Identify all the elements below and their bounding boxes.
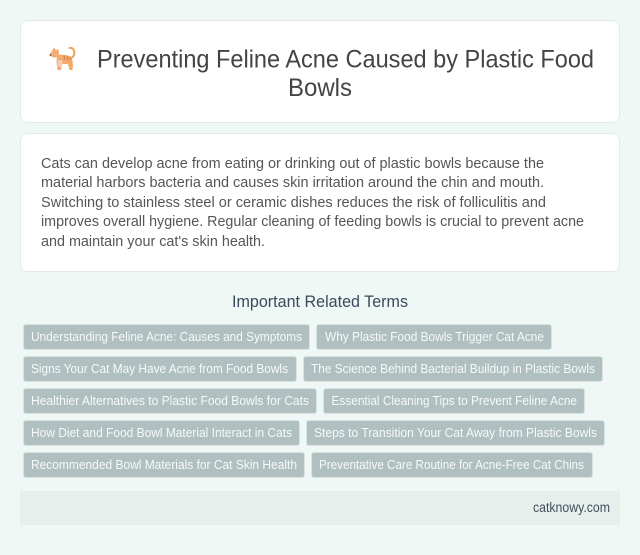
footer source text: catknowy.com [533, 500, 610, 515]
tag: understanding feline acne [24, 324, 310, 350]
tag: transition steps [306, 420, 604, 446]
footer [20, 491, 620, 525]
tag: diet and bowl material [24, 420, 300, 446]
title text [97, 46, 594, 102]
title text: Bowls [288, 74, 352, 102]
tag: preventative care routine [312, 452, 592, 478]
description text [41, 155, 584, 250]
title text: Preventing Feline Acne Caused by Plastic Food [97, 46, 594, 74]
heading: important related terms: Important Related Terms [232, 293, 408, 311]
tag: preventative care routine: Preventative Care Routine for Acne-Free Cat Chins [319, 457, 584, 472]
tag: cleaning tips: Essential Cleaning Tips to Prevent Feline Acne [332, 393, 577, 408]
description text: Switching to stainless steel or ceramic dishes reduces the risk of folliculitis and [41, 194, 546, 211]
tag: understanding feline acne: Understanding Feline Acne: Causes and Symptoms [31, 329, 302, 344]
panel: related term tags [24, 324, 604, 478]
tag: diet and bowl material: How Diet and Food Bowl Material Interact in Cats [31, 425, 292, 440]
description text: and maintain your cat's skin health. [41, 233, 265, 250]
tag: why plastic bowls trigger acne [316, 324, 552, 350]
tag: cleaning tips [324, 388, 584, 414]
panel: description card [20, 134, 620, 272]
icon: cat [50, 48, 74, 70]
tag: why plastic bowls trigger acne: Why Plastic Food Bowls Trigger Cat Acne [325, 329, 544, 344]
tag: science of bacterial buildup: The Science Behind Bacterial Buildup in Plastic Bowls [311, 361, 595, 376]
tag: transition steps: Steps to Transition Your Cat Away from Plastic Bowls [314, 425, 597, 440]
tag: signs of acne [24, 356, 296, 382]
tag: signs of acne: Signs Your Cat May Have Acne from Food Bowls [31, 361, 288, 376]
description text: material harbors bacteria and causes skin irritation around the chin and mouth. [41, 174, 544, 191]
tag: healthier alternatives [24, 388, 316, 414]
tag: science of bacterial buildup [304, 356, 602, 382]
panel: title card [20, 20, 620, 122]
description text: improves overall hygiene. Regular cleaning of feeding bowls is crucial to prevent acne [41, 213, 584, 230]
tag: healthier alternatives: Healthier Alternatives to Plastic Food Bowls for Cats [31, 393, 309, 408]
tag: recommended materials: Recommended Bowl Materials for Cat Skin Health [31, 457, 297, 472]
description text: Cats can develop acne from eating or drinking out of plastic bowls because the [41, 155, 544, 172]
tag: recommended materials [24, 452, 304, 478]
